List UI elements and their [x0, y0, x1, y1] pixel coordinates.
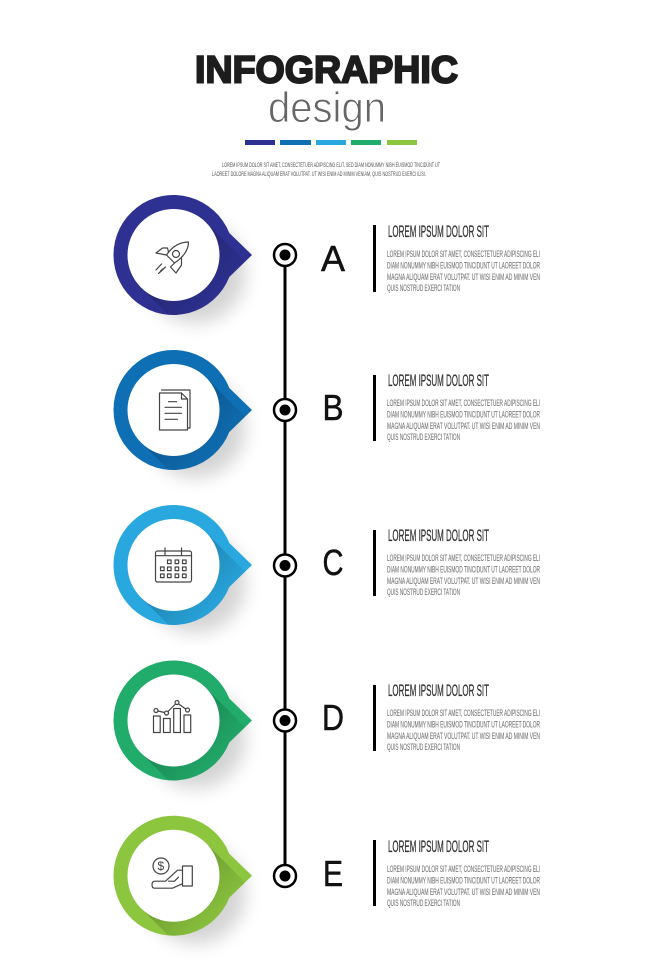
- node A: [274, 244, 296, 266]
- title: INFOGRAPHIC: [195, 50, 458, 92]
- icon: coin and hand: [152, 858, 192, 888]
- text block D: QUIS NOSTRUD EXERCI TATION: [387, 742, 460, 753]
- text block E: LOREM IPSUM DOLOR SIT: [388, 837, 489, 856]
- intro text: LAOREET DOLORE MAGNA ALIQUAM ERAT VOLUTPAT. UT WISI ENIM AD MINIM VENIAM, QUIS NOSTRUD EXERCI ILISI.: [212, 171, 426, 178]
- letter E: E: [323, 853, 343, 894]
- icon: calendar: [156, 548, 192, 582]
- letter C: C: [322, 542, 344, 583]
- text block A: QUIS NOSTRUD EXERCI TATION: [387, 283, 460, 294]
- node C: [274, 554, 296, 576]
- text block B: LOREM IPSUM DOLOR SIT: [388, 371, 489, 390]
- node E: [274, 865, 296, 887]
- text block A: [373, 222, 540, 294]
- text block E: [373, 837, 540, 909]
- node B: [274, 399, 296, 421]
- letter D: D: [322, 697, 344, 738]
- colour bars: [245, 140, 417, 145]
- pin B: document: [114, 350, 252, 484]
- letter A: A: [321, 238, 345, 279]
- intro text: LOREM IPSUM DOLOR SIT AMET, CONSECTETUER ADIPISCING ELIT, SED DIAM NONUMMY NIBH EUISMOD TINCIDUNT UT: [222, 162, 440, 169]
- pin A: rocket: [113, 195, 252, 330]
- intro text: [212, 162, 440, 178]
- text block B: QUIS NOSTRUD EXERCI TATION: [387, 432, 460, 443]
- letter B: B: [322, 387, 344, 428]
- text block A: LOREM IPSUM DOLOR SIT: [388, 222, 489, 241]
- text block C: [373, 526, 540, 598]
- title: [195, 50, 458, 132]
- text block C: LOREM IPSUM DOLOR SIT: [388, 526, 489, 545]
- icon: document: [160, 390, 190, 430]
- text block B: [373, 371, 540, 443]
- icon: coin and hand: $: [158, 859, 164, 873]
- text block E: QUIS NOSTRUD EXERCI TATION: [387, 898, 460, 909]
- text block D: [373, 681, 540, 753]
- pin D: chart: [114, 660, 252, 795]
- timeline line: [284, 255, 286, 876]
- text block D: LOREM IPSUM DOLOR SIT: [388, 681, 489, 700]
- node D: [274, 710, 296, 732]
- icon: rocket: [156, 242, 188, 274]
- text block C: QUIS NOSTRUD EXERCI TATION: [387, 587, 460, 598]
- icon: bar chart: [154, 700, 191, 732]
- pin E: money in hand: [114, 816, 252, 950]
- pin C: calendar: [114, 505, 252, 640]
- title: design: [268, 84, 386, 132]
